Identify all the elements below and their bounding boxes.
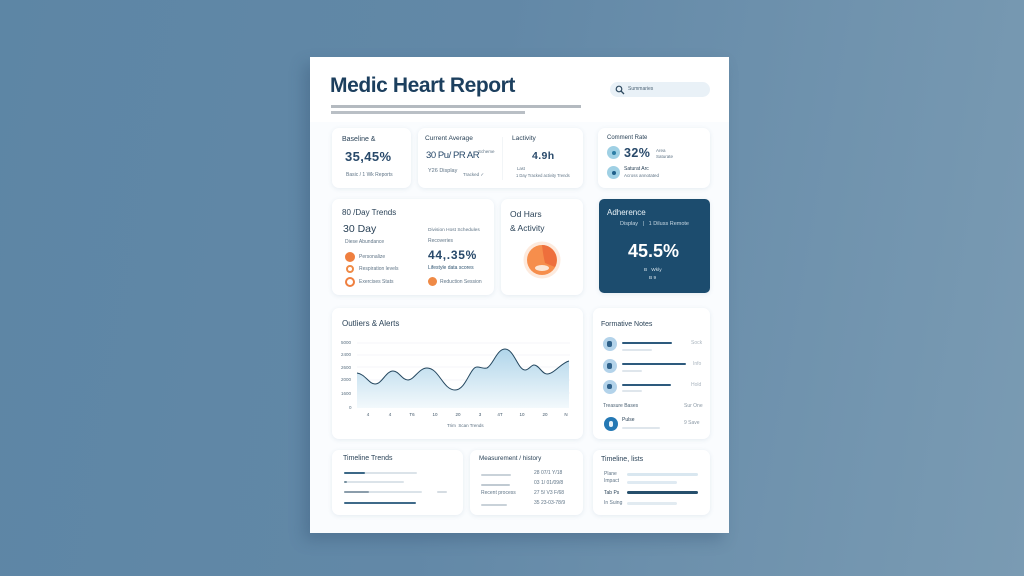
x axis labels: N xyxy=(564,412,568,417)
row bar xyxy=(627,502,677,505)
legend label: Respiration levels xyxy=(359,266,398,272)
y axis labels: 2000 xyxy=(341,377,352,382)
bar 2 xyxy=(344,481,404,483)
trend line xyxy=(357,349,569,390)
y axis labels: 1600 xyxy=(341,391,352,396)
x axis labels: 3 xyxy=(479,412,482,417)
icon: orange ring xyxy=(346,265,354,273)
x axis labels: 4T xyxy=(497,412,503,417)
y axis labels: 2600 xyxy=(341,365,352,370)
row label xyxy=(481,484,510,486)
title underline xyxy=(331,105,581,114)
heading: Current Average xyxy=(425,135,473,142)
content tint xyxy=(310,122,729,533)
icon: highlighted note xyxy=(604,417,618,431)
note sub bar xyxy=(622,427,660,429)
value note: B Wkly xyxy=(644,268,662,273)
x axis labels: 4 xyxy=(367,412,370,417)
y axis labels: 5000 xyxy=(341,340,352,345)
icon: orange dot xyxy=(428,277,437,286)
panel: timeline lists xyxy=(593,450,710,515)
row label: Impact xyxy=(604,478,619,484)
title: Medic Heart Report xyxy=(330,74,515,97)
x axis labels: 20 xyxy=(542,412,548,417)
activity small label: Last xyxy=(517,166,525,171)
row value: 27 5/ V3 F/68 xyxy=(534,490,564,496)
x axis labels: 10 xyxy=(432,412,438,417)
x axis labels: 4 xyxy=(389,412,392,417)
value: 45.5% xyxy=(628,241,679,261)
row label xyxy=(481,474,511,476)
legend label: Exercises Stats xyxy=(359,279,393,285)
right note: Recoveries xyxy=(428,238,453,244)
activity value: 4.9h xyxy=(532,150,555,162)
list value: Sur One xyxy=(684,403,703,409)
heading: Od Hars xyxy=(510,209,542,219)
icon: teal dot xyxy=(607,146,620,159)
note row 2 xyxy=(603,359,701,373)
panel: 30 day trends xyxy=(332,199,494,295)
progress bar xyxy=(622,363,686,365)
icon: search xyxy=(616,86,624,94)
legend label: Personalize xyxy=(359,254,385,260)
sub labels: Display | 1 Diluss Remote xyxy=(620,221,689,227)
heading: Outliers & Alerts xyxy=(342,319,399,328)
unit: Scheme xyxy=(478,149,495,154)
panel: timeline trends xyxy=(332,450,463,515)
legend list xyxy=(345,252,398,287)
value: 30 Pu/ PR AR xyxy=(426,150,479,161)
row 3 xyxy=(481,490,564,496)
heading: Comment Rate xyxy=(607,135,647,141)
row value: Sock xyxy=(691,340,702,346)
row value: 35 23-03-78/9 xyxy=(534,500,565,506)
panel: current average and activity xyxy=(418,128,583,188)
heading: Formative Notes xyxy=(601,321,652,328)
bar sublabel xyxy=(622,349,652,351)
note value: 9 Save xyxy=(684,420,700,426)
bar 3 xyxy=(344,491,422,493)
progress bar xyxy=(622,384,671,386)
activity caption: 1 Day Tracked activity Trends xyxy=(516,173,570,178)
panel: adherence xyxy=(599,199,710,293)
panel: measurement history xyxy=(470,450,583,515)
y axis labels: 2400 xyxy=(341,352,352,357)
search placeholder: Summaries xyxy=(628,86,653,92)
list label: Treasure Bases xyxy=(603,403,638,409)
x axis labels: 20 xyxy=(455,412,461,417)
line chart xyxy=(341,340,570,428)
caption: Basic / 1 Wk Reports xyxy=(346,172,393,178)
x axis labels xyxy=(367,412,568,417)
search box xyxy=(610,82,710,97)
row value: Info xyxy=(693,361,701,367)
icon: orange ring xyxy=(345,277,355,287)
progress bar xyxy=(622,342,672,344)
bar 4 xyxy=(344,502,416,504)
x axis labels: T6 xyxy=(409,412,415,417)
caption: Y26 Display xyxy=(428,168,457,174)
note row 3 xyxy=(603,380,701,394)
row value: Hold xyxy=(691,382,701,388)
value note: B 9 xyxy=(649,276,656,281)
row label xyxy=(481,504,507,506)
value: 44,.35% xyxy=(428,248,477,262)
legend label: Reduction Session xyxy=(440,279,482,285)
row bar xyxy=(627,473,698,476)
row value: 03 1/ 01/09/8 xyxy=(534,480,563,486)
caption: Diese Abundance xyxy=(345,239,384,245)
heading: Baseline & xyxy=(342,136,375,143)
note row 1 xyxy=(603,337,702,351)
icon: orange dot xyxy=(345,252,355,262)
value caption: Lifestyle data scores xyxy=(428,265,474,271)
divider xyxy=(502,137,503,180)
heading xyxy=(510,209,544,233)
panel: formative notes xyxy=(593,308,710,439)
right notes: Division Host Schedules xyxy=(428,228,480,233)
row bar xyxy=(627,491,698,494)
item label: Saturat Arc xyxy=(624,166,649,172)
panel: heart and activity xyxy=(501,199,583,295)
heading: 80 /Day Trends xyxy=(342,208,396,217)
icon: note xyxy=(603,380,617,394)
row label: Recent process xyxy=(481,490,516,496)
panel: outliers and alerts chart xyxy=(332,308,583,439)
heading: Timeline, lists xyxy=(601,456,643,463)
heading: Measurement / history xyxy=(479,455,541,462)
heading: Adherence xyxy=(607,208,646,217)
y axis labels: 0 xyxy=(349,405,352,410)
icon: note xyxy=(603,337,617,351)
side note: Area Saturate xyxy=(656,148,673,159)
bar 1 xyxy=(344,472,417,474)
bar sublabel xyxy=(622,390,642,392)
panel: comment rate xyxy=(598,128,710,188)
bar 3 note xyxy=(437,491,447,493)
heading: Timeline Trends xyxy=(343,455,393,462)
area fill xyxy=(357,349,569,408)
panel: baseline stat xyxy=(332,128,411,188)
icon: note xyxy=(603,359,617,373)
item note: Across annotated xyxy=(624,173,659,178)
value: 35,45% xyxy=(345,149,392,164)
row label: Plane xyxy=(604,471,617,477)
caption note: Tracked ✓ xyxy=(463,172,484,177)
chart caption: Trim Scan Trends xyxy=(447,423,484,428)
value: 32% xyxy=(624,146,650,160)
row label: Tab Ps xyxy=(604,490,619,496)
report page xyxy=(310,57,729,533)
icon: blue dot xyxy=(607,166,620,179)
row bar xyxy=(627,481,677,484)
bar sublabel xyxy=(622,370,642,372)
y axis labels xyxy=(341,340,352,410)
icon: orange pie xyxy=(524,242,560,278)
sub heading: 30 Day xyxy=(343,223,376,235)
heading: & Activity xyxy=(510,223,544,233)
x axis labels: 10 xyxy=(519,412,525,417)
activity heading: Lactivity xyxy=(512,135,536,142)
row label: In Suing xyxy=(604,500,622,506)
note label: Pulse xyxy=(622,417,635,423)
row value: 28 07/1 Y/18 xyxy=(534,470,562,476)
